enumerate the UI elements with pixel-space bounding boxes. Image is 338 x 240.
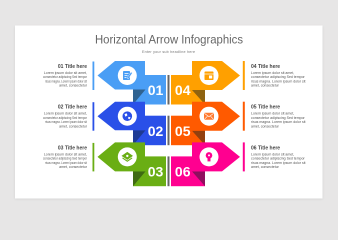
- arrow 02: [98, 102, 145, 130]
- number block 04: 04: [175, 82, 191, 98]
- text block 06: amet, consectetur: [251, 165, 280, 169]
- text block 05: Lorem ipsum dolor sit amet,: [251, 112, 294, 116]
- text block 02: 02 Title here: [58, 105, 87, 111]
- text block 04: amet, consectetur: [251, 84, 280, 88]
- accent bar 06: [243, 142, 245, 171]
- text block 05: 05 Title here: [251, 105, 280, 111]
- text block 02: amet, consectetur: [59, 124, 88, 128]
- number block 02: 02: [148, 123, 163, 139]
- text block 01: risus magna. Lorem ipsum dolor sit: [45, 79, 87, 83]
- text block 03: risus magna. Lorem ipsum dolor sit: [45, 161, 87, 165]
- accent bar 03: [92, 143, 94, 171]
- text block 02: [43, 105, 88, 128]
- text block 06: 06 Title here: [251, 145, 280, 151]
- arrow 04: [192, 61, 240, 90]
- arrow 06: [192, 142, 240, 171]
- text block 01: [43, 64, 88, 88]
- icon: envelope: [200, 107, 218, 126]
- number block 06: 06: [175, 164, 191, 180]
- text block 04: risus magna. Lorem ipsum dolor sit: [251, 79, 305, 83]
- text block 04: consectetur adipiscing Sed tempor: [251, 75, 306, 79]
- title: Horizontal Arrow Infographics: [95, 32, 243, 46]
- step 02: [43, 102, 170, 145]
- white card panel: [15, 26, 322, 199]
- text block 02: consectetur adipiscing Sed tempor: [43, 116, 88, 120]
- accent bar 01: [92, 62, 94, 90]
- accent bar 05: [243, 102, 245, 131]
- text block 05: risus magna. Lorem ipsum dolor sit: [251, 120, 305, 124]
- icon: light bulb: [200, 147, 218, 166]
- number block 03: 03: [148, 164, 163, 180]
- subtitle: Enter your sub headline here: [142, 50, 195, 54]
- arrow 05: [192, 102, 240, 131]
- text block 03: [43, 145, 88, 169]
- text block 05: consectetur adipiscing Sed tempor: [251, 116, 306, 120]
- text block 03: consectetur adipiscing Sed tempor: [43, 157, 88, 161]
- step 04: [171, 61, 306, 104]
- text block 03: 03 Title here: [58, 145, 87, 151]
- text block 05: amet, consectetur: [251, 124, 280, 128]
- text block 03: amet, consectetur: [59, 165, 88, 169]
- accent bar 04: [243, 61, 245, 90]
- text block 01: consectetur adipiscing Sed tempor: [43, 75, 88, 79]
- text block 03: Lorem ipsum dolor sit amet,: [44, 152, 87, 156]
- text block 01: 01 Title here: [58, 64, 87, 70]
- icon: document with pen: [118, 66, 137, 85]
- arrow 03: [98, 142, 145, 171]
- icon: globe: [118, 107, 137, 126]
- icon: calendar window: [200, 66, 218, 85]
- text block 02: Lorem ipsum dolor sit amet,: [44, 112, 87, 116]
- text block 06: consectetur adipiscing Sed tempor: [251, 157, 306, 161]
- accent bar 02: [92, 102, 94, 131]
- arrow 01: [98, 61, 145, 90]
- text block 04: Lorem ipsum dolor sit amet,: [251, 71, 294, 75]
- step 01: [43, 61, 170, 104]
- step 06: [171, 142, 306, 186]
- text block 06: Lorem ipsum dolor sit amet,: [251, 152, 294, 156]
- text block 04: 04 Title here: [251, 64, 280, 70]
- number block 01: 01: [148, 82, 163, 98]
- text block 06: [251, 145, 306, 169]
- step 05: [171, 102, 306, 145]
- text block 01: amet, consectetur: [59, 84, 88, 88]
- text block 06: risus magna. Lorem ipsum dolor sit: [251, 161, 305, 165]
- step 03: [43, 142, 170, 186]
- text block 02: risus magna. Lorem ipsum dolor sit: [45, 120, 87, 124]
- number block 05: 05: [175, 123, 191, 139]
- icon: layered house: [118, 147, 137, 166]
- text block 04: [251, 64, 306, 88]
- text block 05: [251, 105, 306, 128]
- text block 01: Lorem ipsum dolor sit amet,: [44, 71, 87, 75]
